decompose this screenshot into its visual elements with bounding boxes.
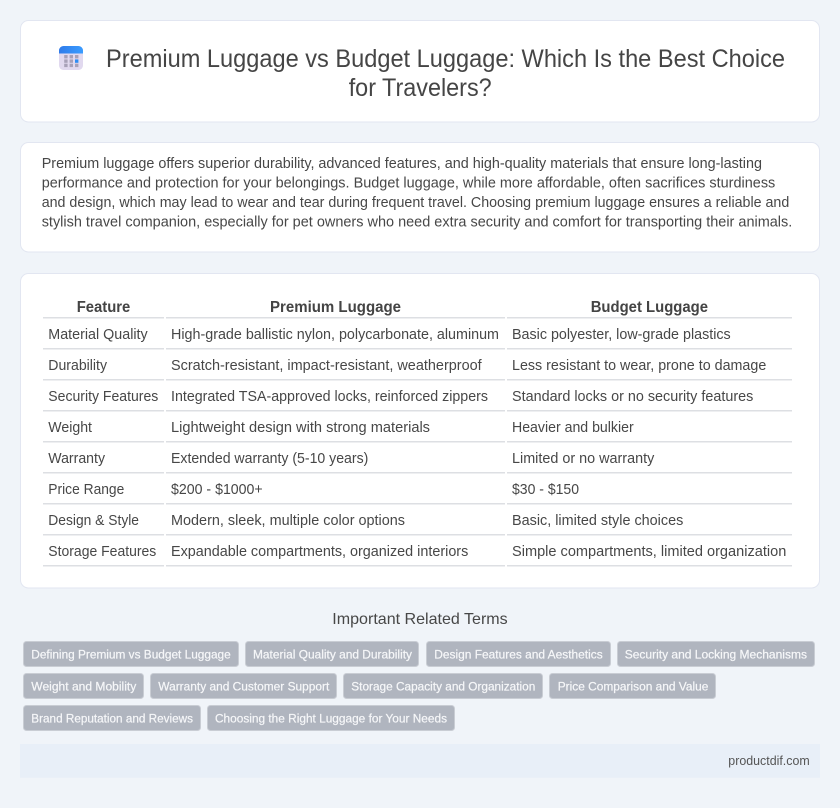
panel: introduction text: stylish travel companion, especially for pet owners who need extra security and comfort for transporting their animals. <box>42 214 792 230</box>
tag: design features and aesthetics <box>426 642 610 666</box>
tag: price comparison and value <box>550 674 716 698</box>
row: warranty: Warranty <box>48 451 106 467</box>
row: material quality: High-grade ballistic nylon, polycarbonate, aluminum <box>171 327 499 343</box>
tag: warranty and customer support <box>150 674 336 698</box>
row: security features: Security Features <box>48 389 158 405</box>
title <box>106 45 785 102</box>
table header row <box>77 299 708 316</box>
tag: brand reputation and reviews: Brand Reputation and Reviews <box>31 711 193 725</box>
tag: security and locking mechanisms <box>618 642 814 666</box>
tag: storage capacity and organization <box>344 674 542 698</box>
row: durability: Less resistant to wear, prone to damage <box>512 358 766 374</box>
tag: defining premium vs budget luggage: Defining Premium vs Budget Luggage <box>31 647 231 661</box>
tag: choosing the right luggage for your needs: Choosing the Right Luggage for Your Needs <box>215 711 447 725</box>
row: durability: Scratch-resistant, impact-resistant, weatherproof <box>171 358 483 374</box>
row: durability: Durability <box>48 358 108 374</box>
heading: important related terms: Important Related Terms <box>332 611 508 628</box>
tag: defining premium vs budget luggage <box>24 642 238 666</box>
row: material quality: Basic polyester, low-grade plastics <box>512 327 731 343</box>
row: price range: $30 - $150 <box>512 482 579 498</box>
tag: weight and mobility: Weight and Mobility <box>31 679 137 693</box>
row: weight: Weight <box>48 420 92 436</box>
row: storage features: Storage Features <box>48 544 156 560</box>
icon: calendar <box>59 46 83 70</box>
row: security features <box>48 389 753 405</box>
row: warranty: Limited or no warranty <box>512 451 655 467</box>
row: design and style: Modern, sleek, multiple color options <box>171 513 405 529</box>
row: storage features <box>48 544 786 560</box>
tag: storage capacity and organization: Storage Capacity and Organization <box>351 679 535 693</box>
row: storage features: Expandable compartments, organized interiors <box>171 544 468 560</box>
footer bar <box>20 744 820 778</box>
panel: introduction text: performance and protection for your belongings. Budget luggage, while more affordable, often sacrifices sturdiness <box>42 175 775 191</box>
table header row: Feature <box>77 299 130 316</box>
table header row: Premium Luggage <box>270 299 401 316</box>
tag: material quality and durability <box>246 642 418 666</box>
row: security features: Integrated TSA-approved locks, reinforced zippers <box>171 389 488 405</box>
tag: material quality and durability: Material Quality and Durability <box>253 647 413 661</box>
panel: introduction text: and design, which may lead to wear and tear during frequent travel. Choosing premium luggage ensures a reliable and <box>42 195 789 211</box>
tag: weight and mobility <box>24 674 144 698</box>
row: design and style: Design & Style <box>48 513 139 529</box>
row: material quality <box>48 327 731 343</box>
tag: price comparison and value: Price Comparison and Value <box>558 679 709 693</box>
panel: introduction text: Premium luggage offers superior durability, advanced features, and high-quality materials that ensure long-lasting <box>42 156 762 172</box>
row: material quality: Material Quality <box>48 327 148 343</box>
panel: introduction text <box>20 142 820 252</box>
row: durability <box>48 358 766 374</box>
tag: design features and aesthetics: Design Features and Aesthetics <box>434 647 603 661</box>
row: security features: Standard locks or no security features <box>512 389 753 405</box>
row: warranty <box>48 451 655 467</box>
panel: comparison table <box>20 274 820 588</box>
footer bar: productdif.com <box>728 753 810 768</box>
row: design and style <box>48 513 683 529</box>
title: for Travelers? <box>349 74 492 102</box>
table header row: Budget Luggage <box>591 299 708 316</box>
tag: security and locking mechanisms: Security and Locking Mechanisms <box>625 647 807 661</box>
tag: warranty and customer support: Warranty and Customer Support <box>158 679 330 693</box>
row: price range <box>48 482 579 498</box>
row: price range: $200 - $1000+ <box>171 482 263 498</box>
tag: choosing the right luggage for your needs <box>208 706 454 730</box>
related term tags <box>24 642 814 730</box>
row: weight <box>48 420 634 436</box>
row: warranty: Extended warranty (5-10 years) <box>171 451 368 467</box>
row: weight: Heavier and bulkier <box>512 420 634 436</box>
row: storage features: Simple compartments, limited organization <box>512 544 786 560</box>
panel: header <box>20 20 820 122</box>
row: weight: Lightweight design with strong materials <box>171 420 430 436</box>
title: Premium Luggage vs Budget Luggage: Which Is the Best Choice <box>106 45 785 73</box>
tag: brand reputation and reviews <box>24 706 200 730</box>
row: design and style: Basic, limited style choices <box>512 513 683 529</box>
row: price range: Price Range <box>48 482 124 498</box>
